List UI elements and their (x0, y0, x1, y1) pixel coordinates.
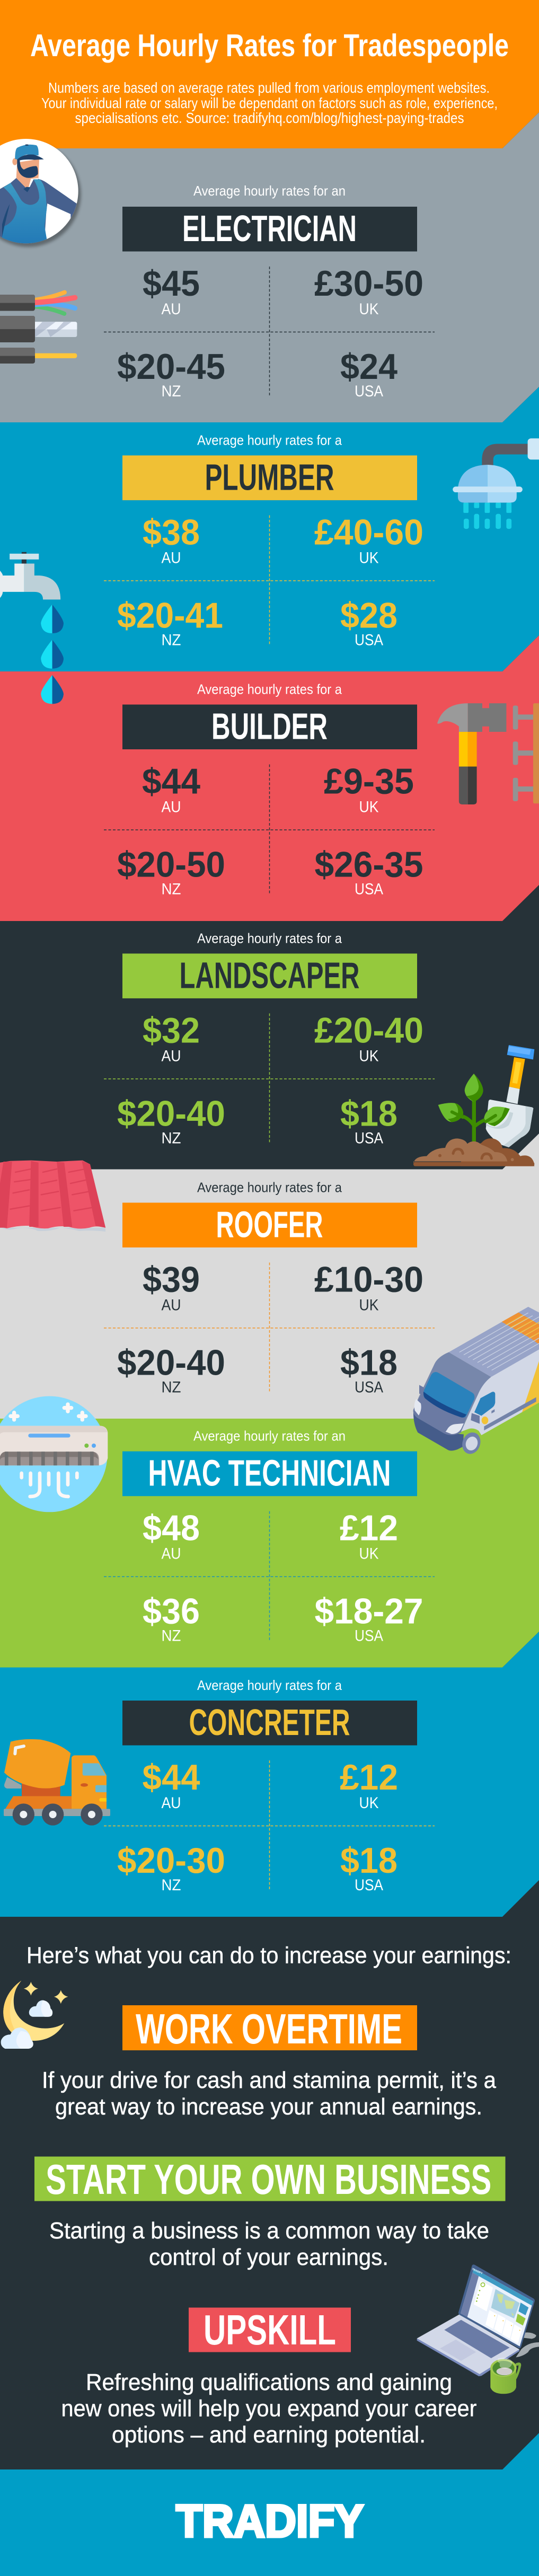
intro text (41, 79, 498, 126)
rate: NZ: $20-50 (117, 845, 225, 885)
panel: landscaper (0, 885, 539, 1169)
rate: AU: AU (161, 300, 181, 318)
rate: AU: $44 (142, 1757, 200, 1798)
title bar: plumber: PLUMBER (205, 456, 334, 498)
title bar: electrician: ELECTRICIAN (182, 208, 357, 249)
title bar: roofer (122, 1203, 417, 1247)
panel: plumber (0, 387, 539, 671)
panel: header (0, 0, 539, 148)
rate: USA: $18 (340, 1840, 397, 1881)
rate: USA: USA (355, 1129, 383, 1147)
rate: USA: USA (355, 1627, 383, 1645)
rate: USA: $26-35 (315, 845, 423, 885)
subheading: Average hourly rates for an (193, 1428, 346, 1444)
subheading: Average hourly rates for a (197, 432, 342, 448)
panel: footer (0, 2433, 539, 2576)
text: upskill: new ones will help you expand your career (61, 2395, 477, 2422)
rate: USA: USA (355, 1876, 383, 1894)
icon: laptop and mug (417, 2264, 539, 2394)
text: upskill (61, 2369, 477, 2448)
rate: UK: UK (359, 1047, 378, 1065)
rate: NZ: NZ (161, 1876, 181, 1894)
rate: UK: UK (359, 1794, 378, 1812)
panel: hvac technician (0, 1383, 539, 1667)
title bar: builder (122, 705, 417, 749)
panel: electrician (0, 112, 539, 422)
rate: UK: £20-40 (314, 1010, 423, 1050)
text: work overtime: If your drive for cash and stamina permit, it’s a (42, 2067, 497, 2093)
panel: concreter (0, 1632, 539, 1917)
icon: moon, stars and clouds (1, 1980, 68, 2049)
subheading: Average hourly rates for an (193, 183, 346, 199)
rate: AU: AU (161, 549, 181, 566)
icon: shovel and plant (413, 1045, 534, 1166)
rate: NZ: $20-40 (117, 1093, 225, 1134)
text: upskill: Refreshing qualifications and gaining (86, 2369, 452, 2395)
rate: UK: £12 (340, 1508, 398, 1548)
title bar: hvac technician: HVAC TECHNICIAN (148, 1453, 391, 1494)
rate: AU: AU (161, 798, 181, 816)
rate: AU: $32 (143, 1010, 200, 1050)
icon: laptop and mug: TRADIFY (471, 2268, 483, 2276)
rate: NZ: NZ (161, 631, 181, 649)
text: work overtime: great way to increase your annual earnings. (55, 2094, 482, 2120)
rate: USA: USA (355, 1379, 383, 1396)
rate: AU: $38 (143, 512, 200, 552)
panel: builder (0, 635, 539, 921)
rate: NZ: $20-45 (117, 347, 225, 387)
rate: AU: AU (161, 1545, 181, 1563)
rate: UK: £12 (340, 1757, 398, 1798)
panel: roofer (0, 1134, 539, 1419)
title bar: hvac technician (122, 1451, 417, 1496)
rate: UK: UK (359, 549, 378, 566)
icon: van (413, 1307, 539, 1456)
rate: NZ: NZ (161, 383, 181, 400)
rate: UK: £10-30 (314, 1259, 423, 1299)
intro text: specialisations etc. Source: tradifyhq.com/blog/highest-paying-trades (75, 110, 464, 126)
tip: upskill: UPSKILL (204, 2306, 336, 2353)
title bar: builder: BUILDER (211, 706, 328, 747)
rate: UK: UK (359, 300, 378, 318)
rate: USA: USA (355, 631, 383, 649)
rate: AU: AU (161, 1794, 181, 1812)
heading: Here’s what you can do to increase your earnings: (26, 1943, 511, 1968)
title bar: plumber (122, 455, 417, 500)
title bar: landscaper: LANDSCAPER (179, 954, 359, 996)
rate: USA: $28 (340, 595, 397, 635)
rate: NZ: NZ (161, 1627, 181, 1645)
rate: NZ: $36 (143, 1591, 200, 1632)
rate: AU: $45 (143, 263, 200, 304)
icon: roof tiles (0, 1161, 105, 1232)
text: start your own business: Starting a business is a common way to take (49, 2218, 489, 2244)
rate: NZ: $20-30 (117, 1840, 225, 1881)
rate: AU: $39 (143, 1259, 200, 1299)
icon: tap with water drops (0, 552, 64, 704)
rate: USA: USA (355, 881, 383, 898)
rate: NZ: $20-40 (117, 1343, 225, 1383)
rate: AU: $44 (142, 761, 200, 801)
subheading: Average hourly rates for a (197, 930, 342, 946)
title bar: roofer: ROOFER (216, 1204, 323, 1245)
icon: concrete mixer truck (4, 1739, 110, 1826)
subheading: Average hourly rates for a (197, 1180, 342, 1196)
logo: Tradify: TRADIFY (176, 2496, 364, 2547)
icon: electrical cables (0, 293, 77, 364)
tip: work overtime: WORK OVERTIME (136, 2005, 402, 2052)
rate: NZ: NZ (161, 1379, 181, 1396)
rate: AU: AU (161, 1296, 181, 1314)
rate: UK: UK (359, 798, 378, 816)
rate: USA: $18 (340, 1093, 397, 1134)
rate: AU: $48 (143, 1508, 200, 1548)
text: upskill: options – and earning potential. (112, 2422, 426, 2448)
text: start your own business (49, 2218, 489, 2270)
rate: USA: USA (355, 383, 383, 400)
text: start your own business: control of your earnings. (149, 2244, 388, 2270)
rate: NZ: $20-41 (117, 595, 223, 635)
rate: USA: $18-27 (315, 1591, 423, 1632)
panel: increase your earnings (0, 1880, 539, 2469)
rate: AU: AU (161, 1047, 181, 1065)
rate: USA: $18 (340, 1343, 397, 1383)
subheading: Average hourly rates for a (197, 1677, 342, 1693)
icon: hammer and nails (437, 703, 539, 804)
rate: UK: £40-60 (314, 512, 423, 552)
icon: shower head (453, 438, 539, 529)
rate: UK: UK (359, 1296, 378, 1314)
text: work overtime (42, 2067, 497, 2120)
rate: NZ: NZ (161, 1129, 181, 1147)
rate: UK: UK (359, 1545, 378, 1563)
rate: USA: $24 (340, 347, 397, 387)
rate: NZ: NZ (161, 881, 181, 898)
subheading: Average hourly rates for a (197, 681, 342, 697)
title bar: concreter: CONCRETER (189, 1702, 350, 1743)
icon: air conditioner (0, 1396, 108, 1512)
rate: UK: £30-50 (314, 263, 423, 304)
title bar: concreter (122, 1701, 417, 1746)
icon: electrician portrait (0, 139, 81, 247)
rate: UK: £9-35 (324, 761, 414, 801)
